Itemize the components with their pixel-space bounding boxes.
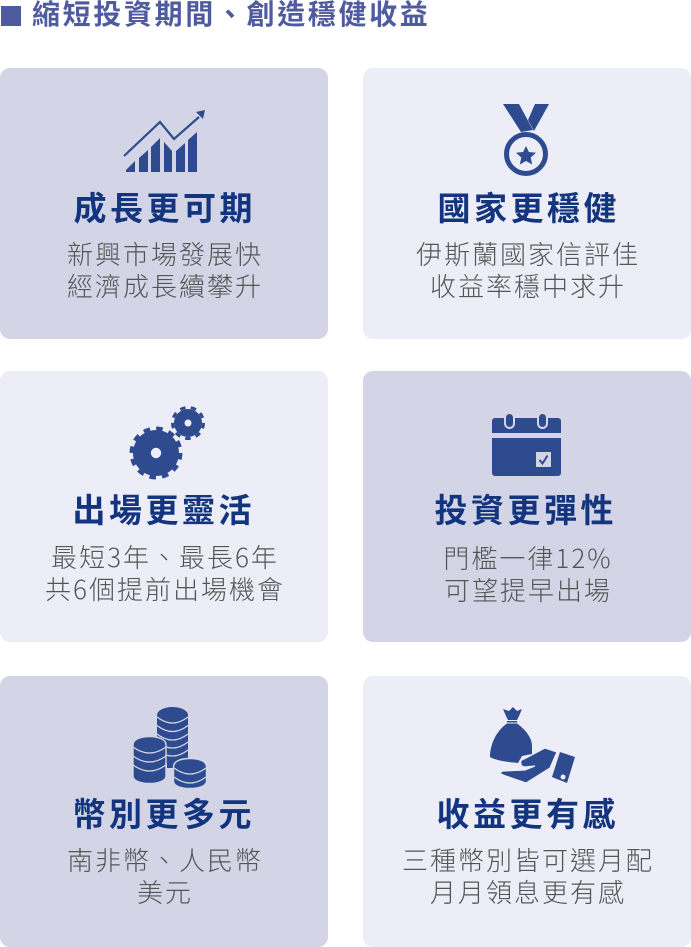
panel: investment flexibility: 門檻一律12% — [443, 539, 613, 576]
icon: calendar — [492, 414, 561, 476]
icon: gears — [130, 406, 205, 480]
panel: income: 月月領息更有感 — [430, 872, 626, 910]
panel: growth: 成長更可期 — [74, 182, 256, 230]
icon: money bag in hand — [490, 707, 575, 783]
panel: national credit — [363, 68, 691, 339]
panel: diverse currencies: 南非幣、人民幣 — [67, 841, 263, 878]
panel: flexible exit: 出場更靈活 — [72, 484, 255, 532]
panel: income: 三種幣別皆可選月配 — [402, 841, 654, 878]
panel: income — [363, 676, 691, 947]
panel: national credit: 國家更穩健 — [438, 182, 620, 230]
panel: diverse currencies — [0, 676, 328, 947]
panel: national credit: 收益率穩中求升 — [430, 266, 626, 304]
icon: rising bar chart — [123, 110, 205, 172]
panel: flexible exit — [0, 371, 328, 642]
panel: flexible exit: 最短3年、最長6年 — [51, 538, 279, 575]
icon: medal — [503, 104, 549, 176]
panel: income: 收益更有感 — [436, 788, 619, 836]
panel: growth — [0, 68, 328, 339]
icon: coin stacks — [134, 707, 206, 788]
panel: diverse currencies: 幣別更多元 — [72, 788, 255, 836]
panel: diverse currencies: 美元 — [137, 872, 193, 910]
panel: investment flexibility — [363, 371, 691, 642]
panel: investment flexibility: 可望提早出場 — [444, 570, 612, 608]
panel: investment flexibility: 投資更彈性 — [434, 484, 617, 532]
panel: national credit: 伊斯蘭國家信評佳 — [416, 235, 640, 272]
panel: flexible exit: 共6個提前出場機會 — [45, 570, 285, 606]
panel: growth: 經濟成長續攀升 — [67, 266, 263, 304]
panel: growth: 新興市場發展快 — [67, 235, 263, 272]
